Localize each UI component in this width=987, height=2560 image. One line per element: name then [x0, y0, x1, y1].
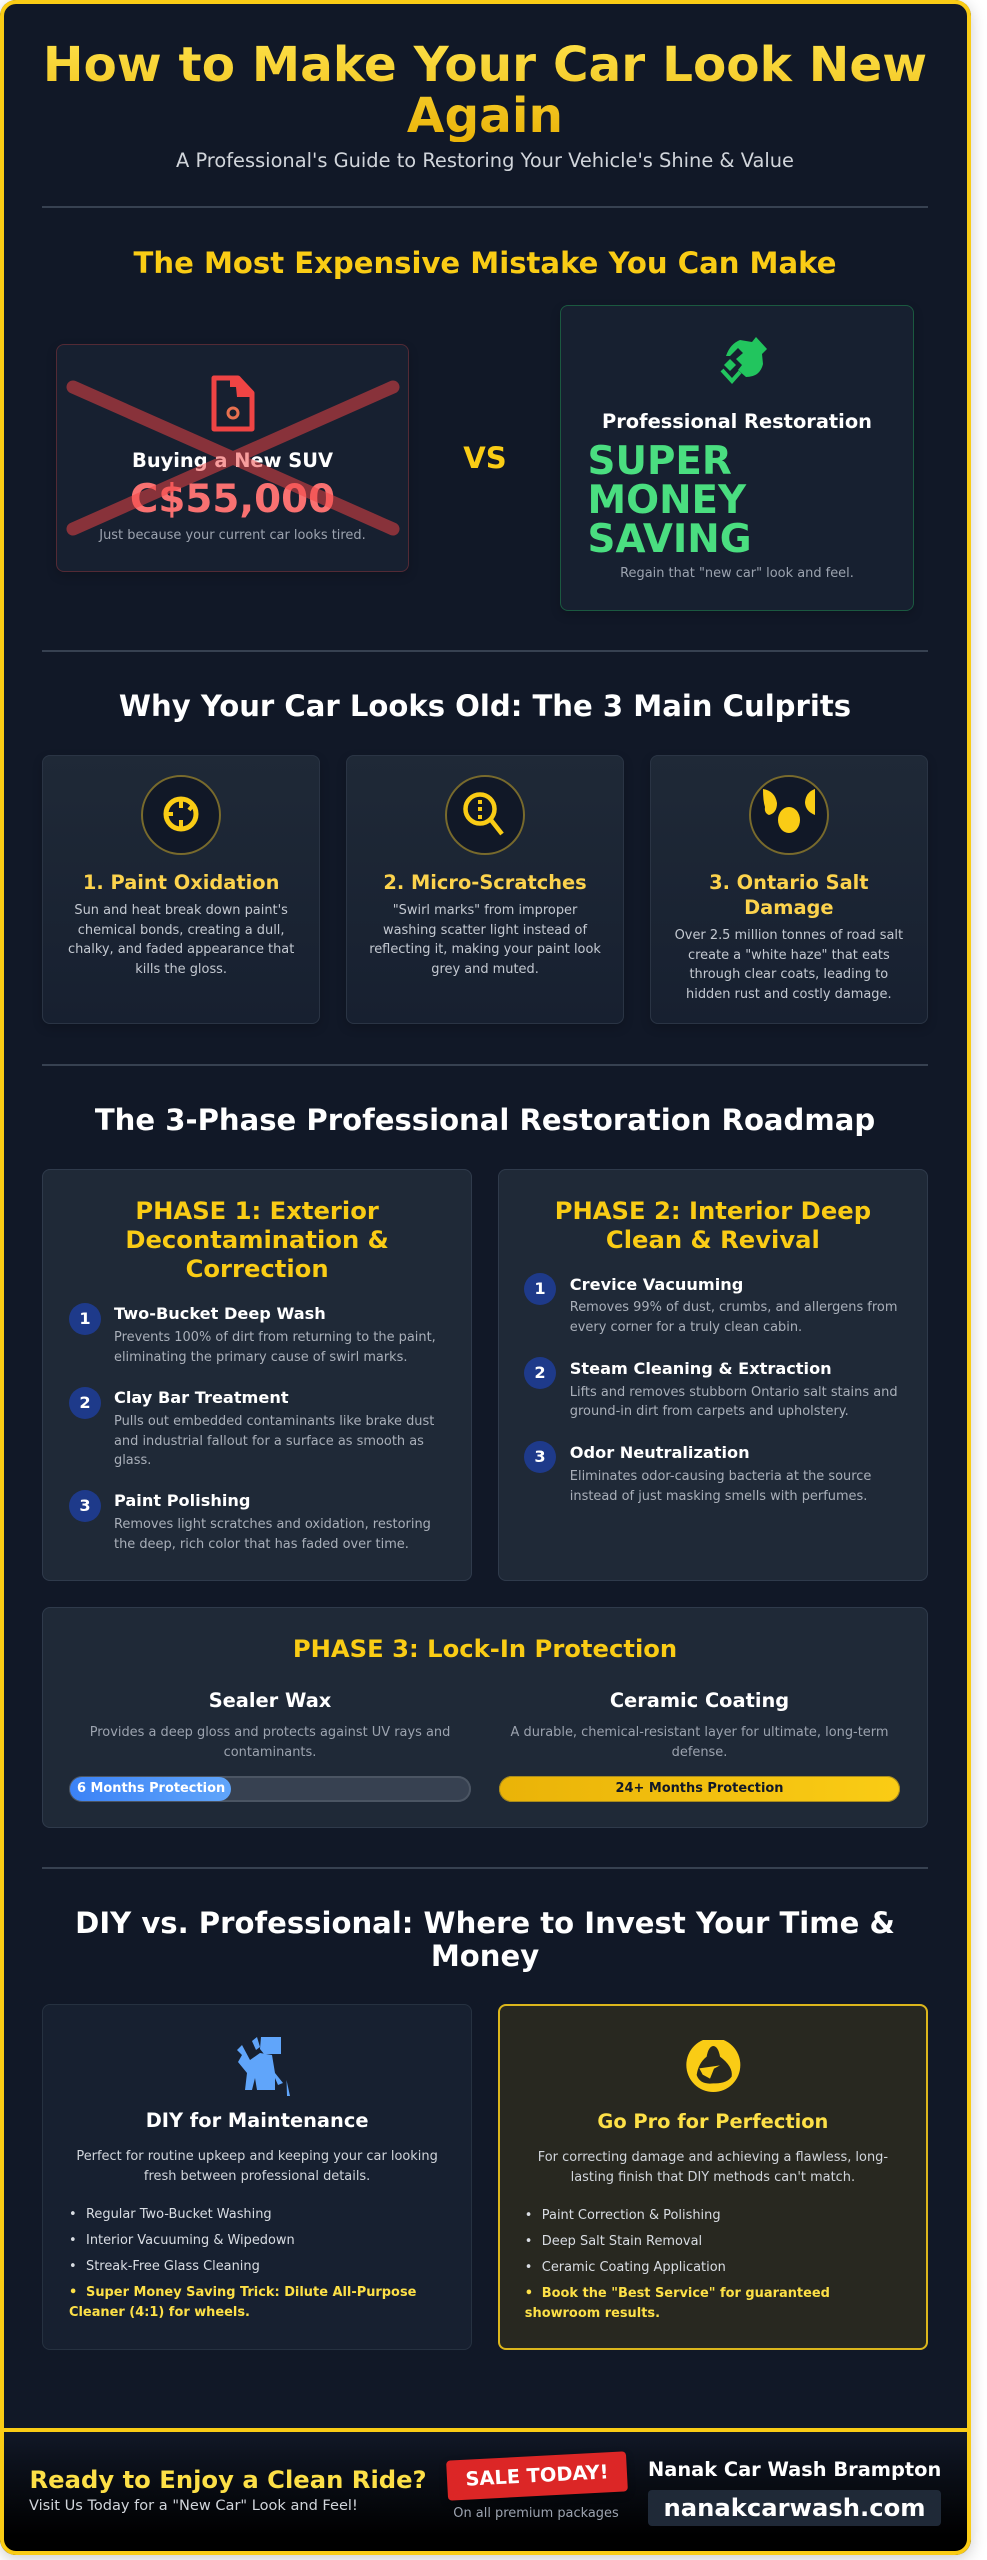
badge 3 — [69, 1490, 101, 1522]
description — [68, 903, 294, 977]
price: C$55,000 — [130, 477, 335, 522]
bar: 24+ months: 24+ Months Protection — [615, 1781, 784, 1796]
subtitle: A Professional's Guide to Restoring Your Vehicle's Shine & Value — [176, 149, 794, 172]
step text: and industrial fallout for a surface as smooth as — [114, 1434, 424, 1449]
description: Over 2.5 million tonnes of road salt — [675, 928, 903, 943]
panel: buying a new SUV — [56, 344, 409, 572]
step text: Removes 99% of dust, crumbs, and allergens from — [570, 1300, 897, 1315]
description: hidden rust and costly damage. — [686, 987, 892, 1002]
step text: Lifts and removes stubborn Ontario salt stains and — [570, 1385, 898, 1400]
icon: salt blobs — [749, 775, 829, 855]
bar: 6 months — [69, 1776, 471, 1802]
heading: Clean & Revival — [606, 1224, 820, 1254]
panel: phase 1 — [42, 1169, 472, 1581]
icon: blue DIY — [237, 2037, 290, 2096]
step text: glass. — [114, 1453, 151, 1468]
heading: DIY vs professional: Money — [431, 1938, 539, 1972]
description: washing scatter light instead of — [383, 923, 587, 938]
badge 2 — [524, 1357, 556, 1389]
text — [76, 2149, 438, 2184]
super money saving: SUPER — [588, 438, 732, 484]
call to action heading: Ready to Enjoy a Clean Ride? — [30, 2465, 427, 2494]
heading: 3. Ontario Salt — [709, 870, 869, 894]
ceramic heading: Ceramic Coating — [610, 1689, 789, 1712]
heading: 2. Micro-Scratches — [383, 870, 587, 894]
step text: eliminating the primary cause of swirl marks. — [114, 1350, 408, 1365]
sealer heading: Sealer Wax — [209, 1689, 331, 1712]
heading: most expensive mistake: The Most Expensive Mistake You Can Make — [134, 246, 836, 280]
description: kills the gloss. — [135, 962, 227, 977]
note: Regain that "new car" look and feel. — [620, 566, 854, 581]
title: How to Make Your Car Look New — [43, 36, 927, 92]
ceramic text: defense. — [672, 1744, 727, 1760]
heading — [555, 1196, 871, 1254]
step text: Pulls out embedded contaminants like brake dust — [114, 1414, 434, 1429]
step text: instead of just masking smells with perfumes. — [570, 1489, 867, 1504]
panel: go pro — [498, 2004, 928, 2350]
list item: highlighted tip: showroom results. — [525, 2306, 660, 2321]
super money saving — [588, 438, 752, 562]
description — [369, 903, 601, 977]
heading: culprits: Why Your Car Looks Old: The 3 Main Culprits — [119, 689, 851, 723]
list item: • — [525, 2234, 532, 2249]
list item: • — [525, 2208, 532, 2223]
badge 3 — [524, 1441, 556, 1473]
vs label: VS — [463, 441, 507, 475]
panel: ontario salt damage — [650, 755, 928, 1024]
panel: professional restoration — [560, 305, 914, 611]
heading: Damage — [744, 896, 834, 918]
step text: the deep, rich color that has faded over time. — [114, 1537, 409, 1552]
call to action text: Visit Us Today for a "New Car" Look and Feel! — [29, 2497, 358, 2514]
icon: oxidation — [141, 775, 221, 855]
heading: DIY vs professional — [75, 1906, 895, 1972]
heading: PHASE 2: Interior Deep — [555, 1196, 871, 1224]
step title: Odor Neutralization — [570, 1443, 750, 1462]
description: create a "white haze" that eats — [688, 948, 890, 963]
icon: green plug and check — [720, 337, 767, 384]
heading: DIY for Maintenance — [146, 2109, 368, 2132]
icon: red cross out — [66, 380, 400, 536]
icon: magnifier — [445, 775, 525, 855]
list item: Interior Vacuuming & Wipedown — [86, 2233, 295, 2248]
badge 3: 3 — [79, 1496, 91, 1515]
badge 1 — [524, 1273, 556, 1305]
text: lasting finish that DIY methods can't match. — [571, 2170, 855, 2185]
step text — [114, 1330, 436, 1365]
list item: highlighted tip: • — [525, 2286, 533, 2301]
description: "Swirl marks" from improper — [393, 903, 577, 918]
step title: Clay Bar Treatment — [114, 1388, 289, 1407]
text — [538, 2150, 888, 2185]
panel: phase 2 — [498, 1169, 928, 1581]
badge 2: 2 — [79, 1393, 91, 1412]
bar: 24+ months — [499, 1776, 900, 1802]
step text: Prevents 100% of dirt from returning to the paint, — [114, 1330, 436, 1345]
list item: • — [525, 2260, 532, 2275]
description: grey and muted. — [431, 962, 539, 977]
list item: Paint Correction & Polishing — [542, 2208, 721, 2223]
badge 1: 1 — [534, 1279, 546, 1298]
step text — [570, 1385, 898, 1419]
list item: Ceramic Coating Application — [542, 2260, 726, 2275]
label: professional restoration: Professional Restoration — [602, 410, 872, 433]
note: Just because your current car looks tired. — [99, 528, 366, 543]
list item: highlighted tip — [69, 2285, 416, 2320]
heading: PHASE 3: Lock-In Protection — [293, 1634, 677, 1662]
sealer text: contaminants. — [224, 1744, 316, 1760]
list item: highlighted tip: Book the "Best Service" for guaranteed — [542, 2286, 830, 2301]
badge 2: 2 — [534, 1363, 546, 1382]
step text: ground-in dirt from carpets and upholstery. — [570, 1404, 849, 1419]
step title: Steam Cleaning & Extraction — [570, 1359, 832, 1378]
icon: gold emblem — [686, 2040, 740, 2092]
list item: highlighted tip: Super Money Saving Trick: Dilute All-Purpose — [86, 2285, 416, 2300]
sale badge — [446, 2451, 628, 2501]
description — [675, 928, 903, 1002]
step title: Two-Bucket Deep Wash — [114, 1304, 326, 1323]
heading — [709, 870, 869, 918]
label: buying a new SUV: Buying a New SUV — [132, 449, 333, 472]
text: fresh between professional details. — [144, 2169, 370, 2184]
heading: DIY vs professional: DIY vs. Professional: Where to Invest Your Time & — [75, 1906, 895, 1940]
sealer text: Provides a deep gloss and protects against UV rays and — [90, 1725, 450, 1740]
list item: highlighted tip: Cleaner (4:1) for wheels. — [69, 2305, 250, 2320]
list item: • — [69, 2233, 77, 2248]
sale badge: SALE TODAY! — [465, 2460, 609, 2491]
heading: 1. Paint Oxidation — [83, 870, 279, 894]
badge 1: 1 — [79, 1309, 91, 1328]
panel: micro-scratches — [346, 755, 624, 1024]
super money saving: MONEY — [588, 478, 746, 522]
sale note: On all premium packages — [453, 2506, 619, 2521]
heading — [125, 1196, 389, 1282]
business name: Nanak Car Wash Brampton — [648, 2458, 941, 2481]
heading: PHASE 1: Exterior — [135, 1196, 379, 1224]
text: Perfect for routine upkeep and keeping your car looking — [76, 2149, 438, 2164]
step text: Eliminates odor-causing bacteria at the source — [570, 1469, 871, 1484]
description: Sun and heat break down paint's — [74, 903, 288, 918]
description: through clear coats, leading to — [689, 967, 888, 982]
list item: • — [69, 2207, 77, 2222]
bar: 6 months: 6 Months Protection — [77, 1781, 225, 1796]
badge 1 — [69, 1303, 101, 1335]
title: Again — [407, 88, 563, 144]
heading: Correction — [186, 1254, 329, 1282]
step text — [570, 1300, 897, 1335]
super money saving: SAVING — [588, 516, 752, 562]
list item: highlighted tip — [525, 2286, 830, 2321]
badge 2 — [69, 1387, 101, 1419]
ceramic text — [510, 1725, 888, 1760]
title — [42, 40, 928, 142]
description: chalky, and faded appearance that — [68, 942, 294, 957]
step title: Crevice Vacuuming — [570, 1275, 743, 1294]
heading: Go Pro for Perfection — [597, 2110, 828, 2133]
list item: highlighted tip: • — [69, 2285, 77, 2300]
step text: Removes light scratches and oxidation, restoring — [114, 1517, 431, 1532]
list item: Streak-Free Glass Cleaning — [86, 2259, 260, 2274]
panel: phase 3 — [42, 1607, 928, 1828]
heading: Decontamination & — [125, 1224, 389, 1254]
badge 3: 3 — [534, 1447, 546, 1466]
step text — [570, 1469, 871, 1504]
footer — [0, 2428, 971, 2555]
list item: • — [69, 2259, 77, 2274]
heading: roadmap: The 3-Phase Professional Restoration Roadmap — [95, 1103, 875, 1137]
step text — [114, 1414, 434, 1468]
step text — [114, 1517, 431, 1552]
sealer text — [90, 1725, 450, 1760]
panel: DIY — [42, 2004, 472, 2350]
website box: nanakcarwash.com — [663, 2493, 926, 2522]
description: chemical bonds, creating a dull, — [78, 923, 284, 938]
ceramic text: A durable, chemical-resistant layer for ultimate, long-term — [511, 1725, 888, 1740]
list item: Regular Two-Bucket Washing — [86, 2207, 272, 2222]
text: For correcting damage and achieving a flawless, long- — [538, 2150, 888, 2165]
step title: Paint Polishing — [114, 1491, 250, 1510]
description: reflecting it, making your paint look — [369, 942, 601, 957]
step text: every corner for a truly clean cabin. — [570, 1320, 802, 1335]
panel: paint oxidation — [42, 755, 320, 1024]
icon: file — [212, 376, 254, 432]
list item: Deep Salt Stain Removal — [542, 2234, 702, 2249]
